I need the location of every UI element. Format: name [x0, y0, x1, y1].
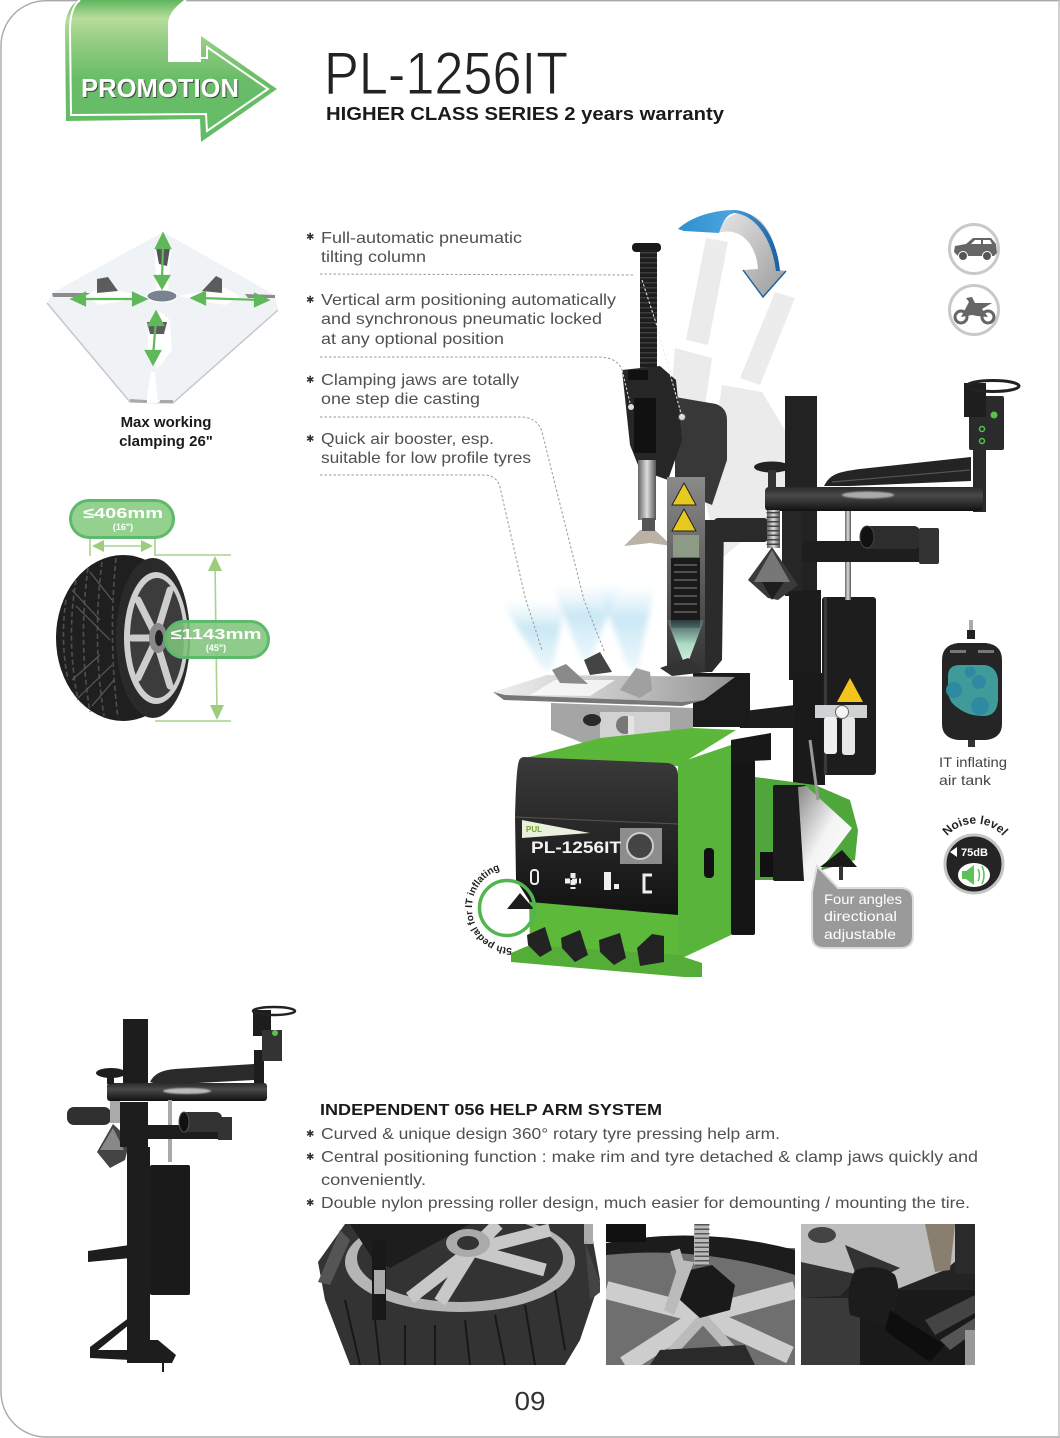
photo: nylon roller on tyre — [801, 1224, 975, 1365]
turntable and mechanism — [493, 652, 750, 754]
feature list: at any optional position — [321, 331, 504, 348]
vehicle icon: car — [950, 224, 998, 274]
feature list: Clamping jaws are totally — [321, 372, 519, 389]
callout: fifth pedal ring: 5th pedal for IT inflating — [465, 865, 512, 955]
clamping table illustration — [47, 232, 278, 403]
callout: four angles: directional — [824, 908, 897, 924]
leader lines — [320, 274, 682, 653]
help arm assembly — [714, 380, 1019, 600]
black control panel: PL-1256IT — [531, 838, 622, 857]
clamping caption — [119, 414, 213, 450]
air spray cones — [500, 585, 655, 670]
help arm text: Central positioning function : make rim and tyre detached & clamp jaws quickly and — [321, 1149, 978, 1166]
feature list: one step die casting — [321, 391, 480, 408]
noise level badge: 75dB — [961, 847, 988, 859]
help arm text — [306, 1102, 978, 1212]
clamping caption: clamping 26" — [119, 433, 213, 450]
photo: central clamp on spokes — [606, 1224, 795, 1365]
feature list — [306, 230, 616, 467]
column tower with warning labels — [667, 477, 724, 672]
green air cone on tower — [667, 620, 704, 668]
callout: four angles: Four angles — [824, 891, 902, 907]
feature list: ✱ — [306, 375, 314, 386]
tilting column head — [622, 243, 727, 546]
help arm text: INDEPENDENT 056 HELP ARM SYSTEM — [320, 1102, 662, 1119]
callout: four angles — [812, 866, 913, 948]
pill: rim width: (16") — [113, 522, 133, 532]
vehicle icon: motorbike — [950, 286, 998, 334]
callout: four angles: adjustable — [824, 926, 896, 942]
help arm text: conveniently. — [321, 1172, 426, 1189]
pill: tyre diameter — [166, 622, 268, 658]
pill: tyre diameter: ≤1143mm — [170, 626, 262, 643]
green cabinet — [511, 728, 771, 977]
noise level badge: Noise level — [942, 816, 1008, 836]
rear green housing, pad and silver cone — [755, 740, 858, 881]
air tank caption: IT inflating — [939, 754, 1007, 770]
page number: 09 — [514, 1386, 546, 1416]
subtitle: HIGHER CLASS SERIES 2 years warranty — [326, 104, 724, 124]
feature list: and synchronous pneumatic locked — [321, 311, 602, 328]
tyre changer machine — [493, 243, 1019, 977]
feature list: ✱ — [306, 295, 314, 306]
clamping caption: Max working — [121, 414, 211, 431]
tyre size diagram — [56, 536, 231, 721]
noise level badge — [942, 816, 1008, 894]
help arm text: ✱ — [306, 1152, 314, 1163]
feature list: ✱ — [306, 232, 314, 243]
feature list: suitable for low profile tyres — [321, 450, 531, 467]
blue tilt arrow — [678, 210, 786, 297]
feature list: Quick air booster, esp. — [321, 431, 494, 448]
help arm text: ✱ — [306, 1198, 314, 1209]
help arm text: ✱ — [306, 1129, 314, 1140]
callout: fifth pedal ring — [465, 865, 536, 955]
black control panel: PUL — [526, 825, 542, 834]
foot pedals — [527, 927, 664, 966]
help arm unit, side view — [67, 1007, 295, 1372]
feature list: ✱ — [306, 434, 314, 445]
feature list: Full-automatic pneumatic — [321, 230, 522, 247]
title: PL-1256IT — [324, 40, 568, 107]
bracket, filter-regulator and warning sign — [736, 678, 867, 755]
IT inflating air tank — [942, 620, 1002, 747]
ghost tilted column positions — [668, 238, 795, 560]
help arm text: Curved & unique design 360° rotary tyre pressing help arm. — [321, 1126, 780, 1143]
air tank caption: air tank — [939, 772, 992, 788]
photo: tyre on rim — [318, 1212, 603, 1365]
air tank caption — [939, 754, 1007, 788]
rear column and cylinder box — [785, 396, 876, 785]
black control panel — [515, 757, 678, 915]
promotion arrow badge: PROMOTION — [81, 73, 239, 103]
pill: rim width: ≤406mm — [83, 505, 163, 522]
help arm text: Double nylon pressing roller design, much easier for demounting / mounting the tire. — [321, 1195, 970, 1212]
feature list: Vertical arm positioning automatically — [321, 292, 616, 309]
pill: tyre diameter: (45") — [206, 643, 226, 653]
pill: rim width — [70, 500, 174, 538]
promotion arrow badge — [65, 0, 277, 142]
feature list: tilting column — [321, 249, 426, 266]
promotion arrow badge: PROMOTION — [82, 74, 240, 104]
